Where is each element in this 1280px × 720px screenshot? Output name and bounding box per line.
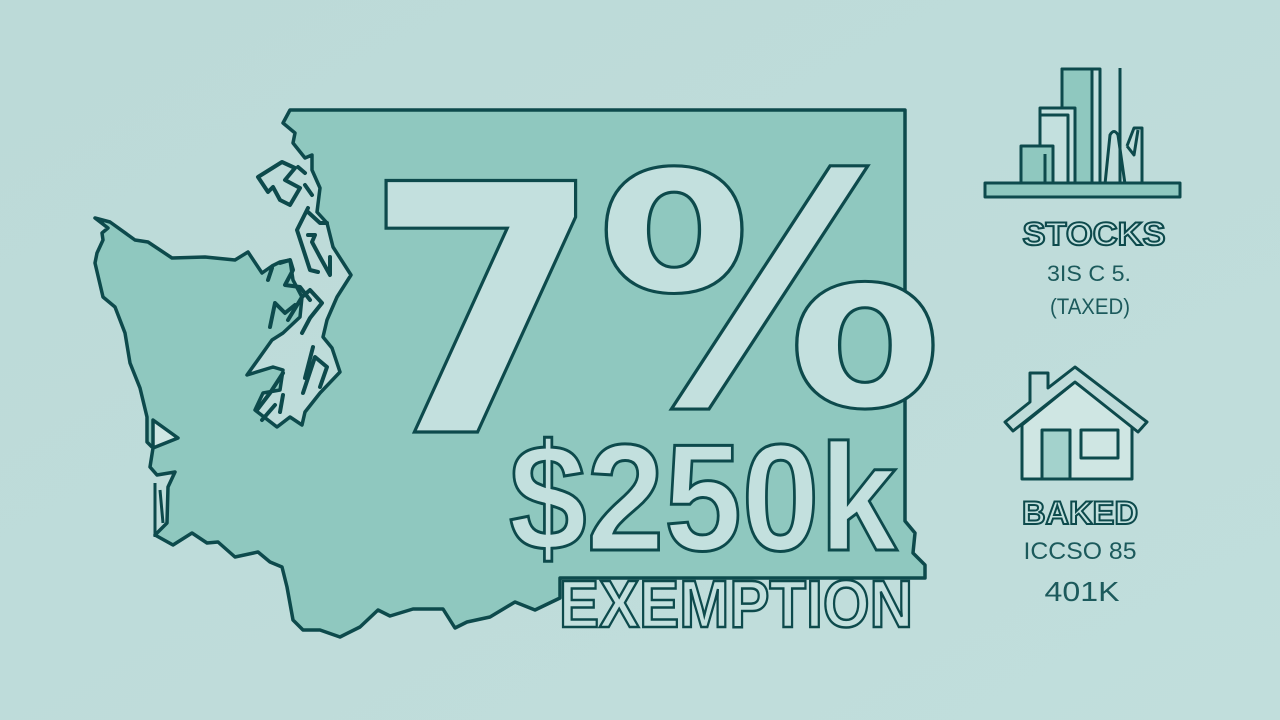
stocks label xyxy=(1022,216,1166,319)
house label: BAKED xyxy=(1022,495,1138,531)
coastal harbor xyxy=(153,420,178,448)
headline: percent sign: % xyxy=(595,107,944,481)
stocks taxed note: (TAXED) xyxy=(1050,294,1130,319)
coastal spit xyxy=(155,483,163,537)
401k label: 401K xyxy=(1044,576,1120,607)
label: exemption: EXEMPTION xyxy=(559,567,913,642)
map: Washington state outline xyxy=(95,110,925,637)
stocks label: STOCKS xyxy=(1022,216,1166,252)
amount: $250k: $250k xyxy=(509,413,897,583)
house detail line: ICCSO 85 xyxy=(1024,538,1136,565)
Puget Sound islands xyxy=(257,162,330,420)
icon: stocks buildings xyxy=(985,68,1180,197)
house label xyxy=(1022,495,1138,607)
stocks detail line: 3IS C 5. xyxy=(1047,261,1131,286)
headline: 7: 7 xyxy=(363,113,603,514)
icon: house xyxy=(1005,367,1147,479)
